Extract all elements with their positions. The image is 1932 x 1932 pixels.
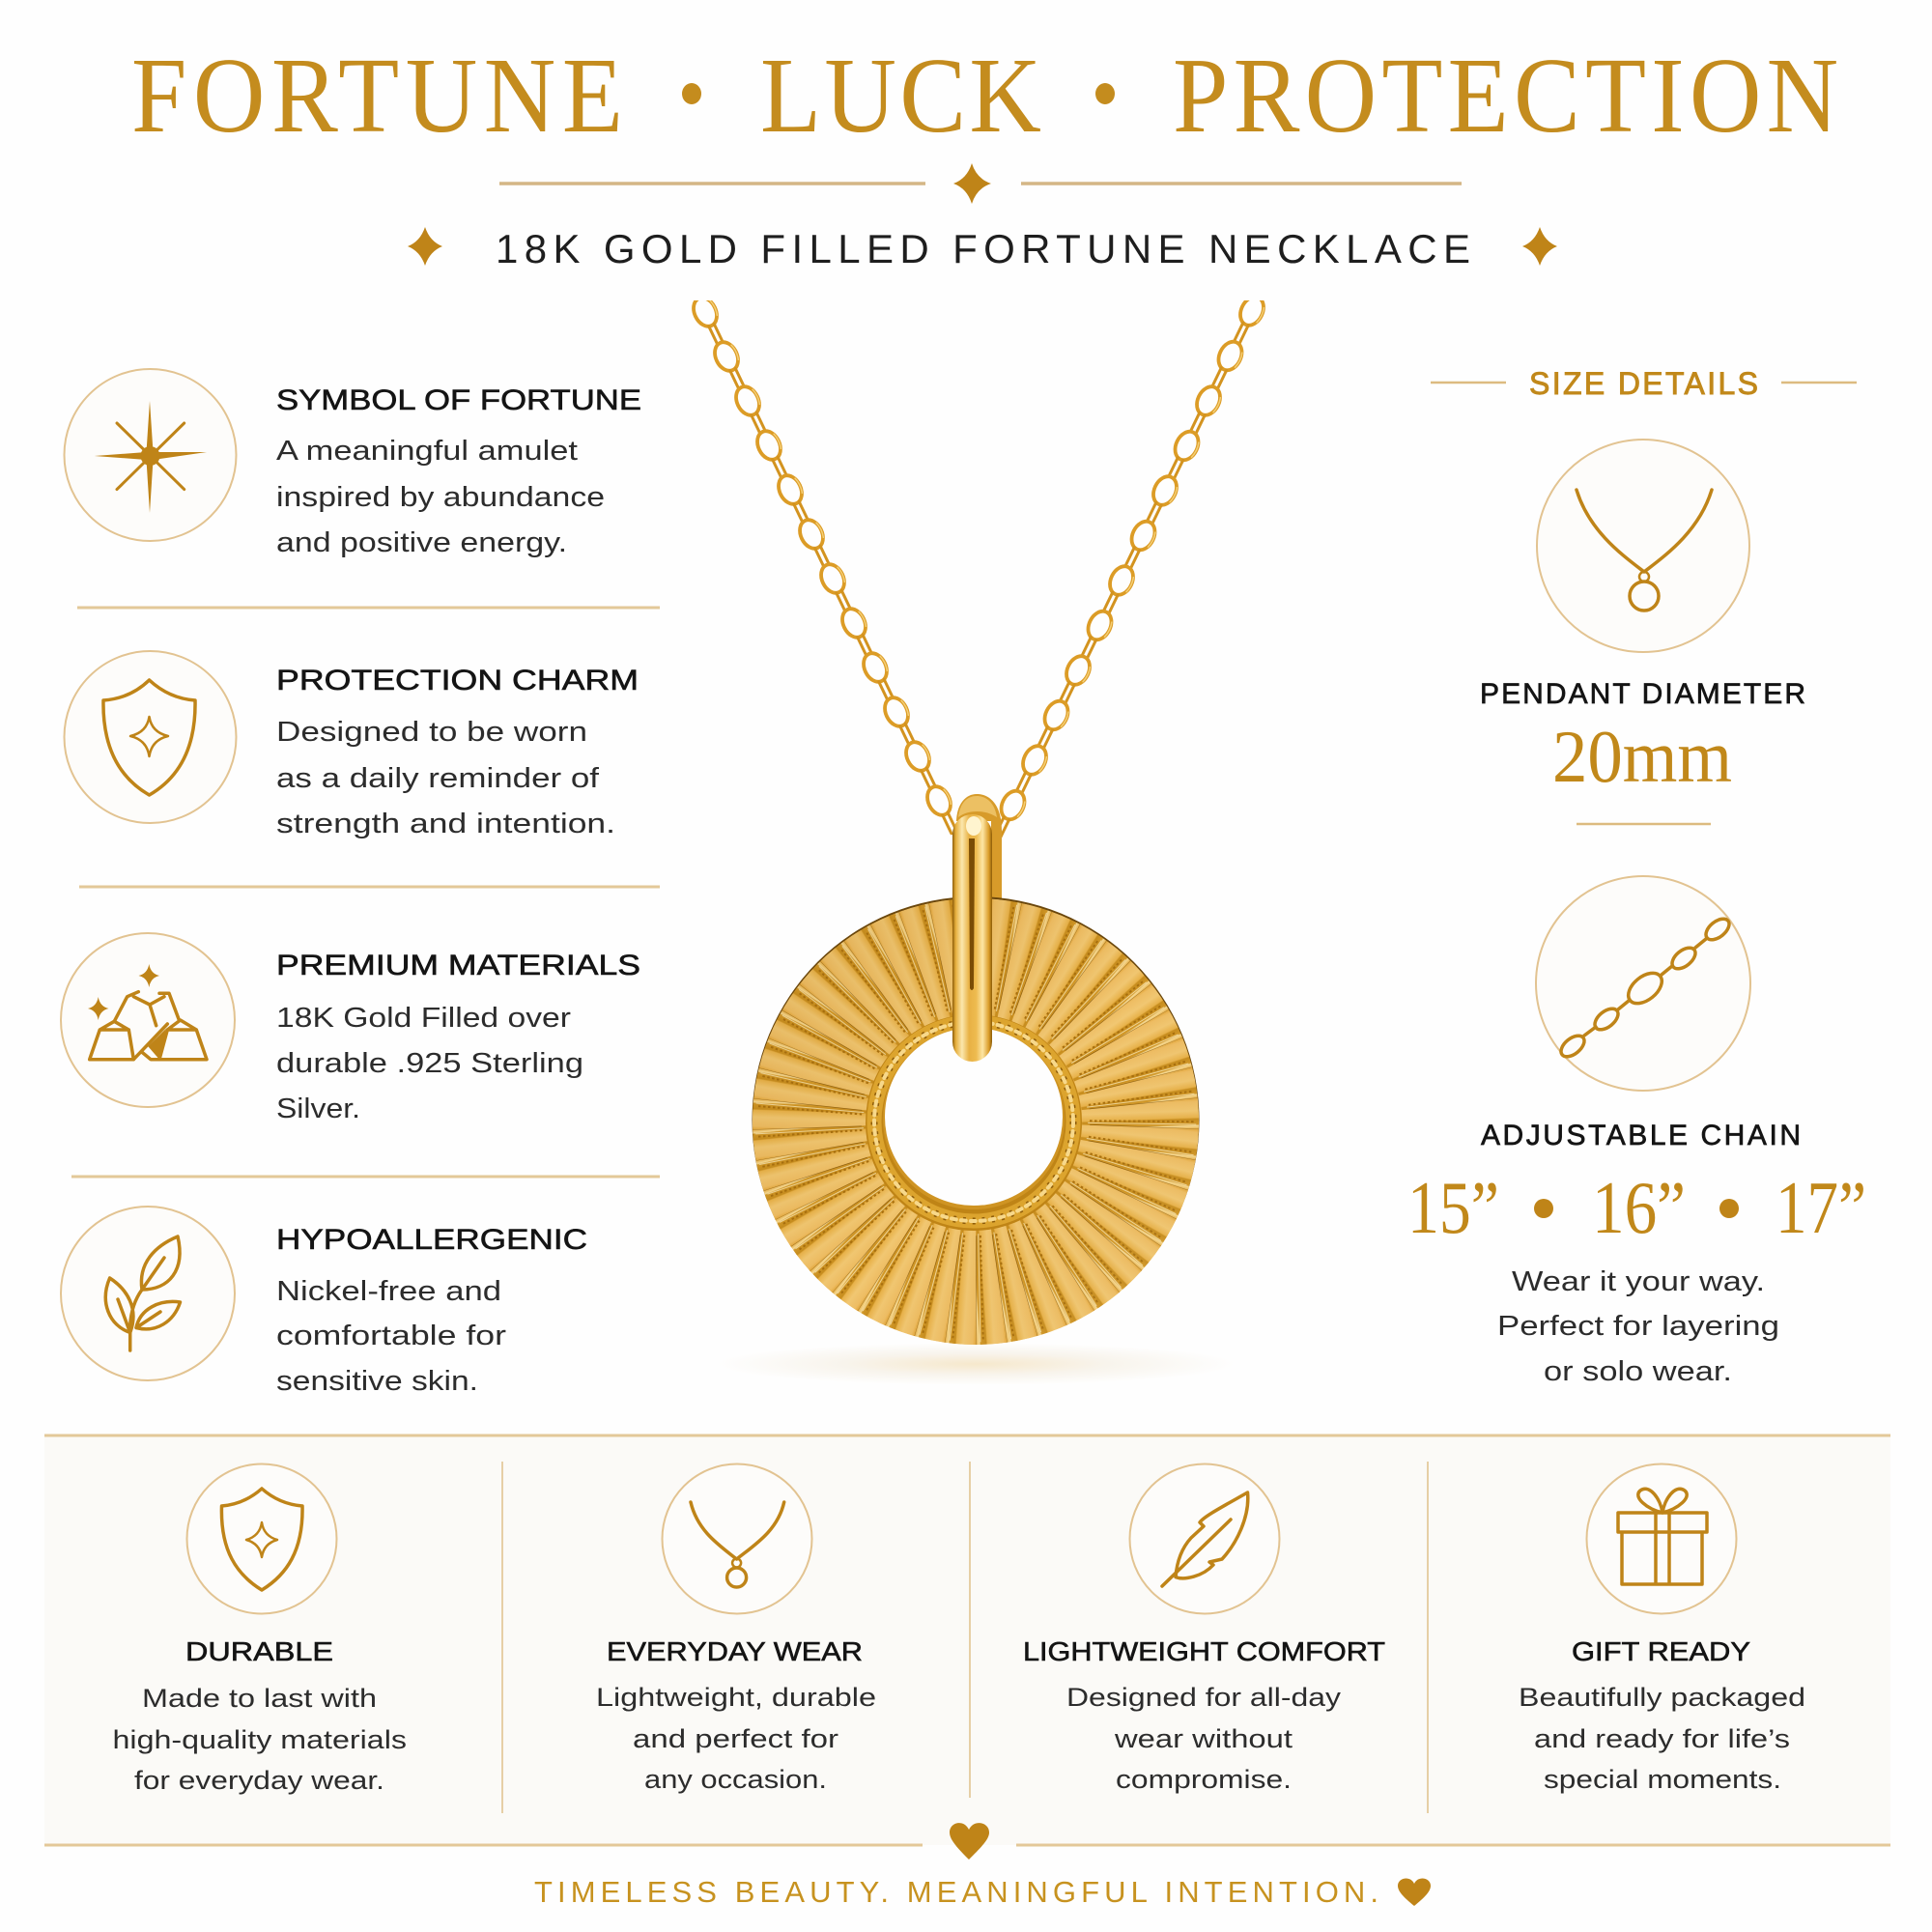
panel: bottom benefits (44, 1435, 1890, 1845)
size note: Perfect for layering (1497, 1311, 1779, 1342)
adjustable chain: 16” (1592, 1166, 1686, 1249)
footer tagline: TIMELESS BEAUTY. MEANINGFUL INTENTION. (534, 1875, 1378, 1909)
feature: premium materials: 18K Gold Filled over (276, 1003, 571, 1034)
size note: Wear it your way. (1512, 1266, 1765, 1297)
benefit: lightweight comfort: LIGHTWEIGHT COMFORT (1023, 1636, 1385, 1666)
benefit: durable: Made to last with (142, 1684, 377, 1713)
benefit: durable: high-quality materials (112, 1725, 407, 1754)
feature: protection charm: PROTECTION CHARM (276, 665, 639, 696)
pendant (752, 794, 1200, 1380)
feature: symbol of fortune: and positive energy. (276, 527, 567, 558)
panel: left features (61, 369, 660, 1397)
adjustable chain (1407, 876, 1866, 1249)
feature: protection charm (64, 651, 639, 839)
benefit: everyday wear: and perfect for (633, 1724, 838, 1753)
title: PROTECTION (1173, 37, 1838, 156)
benefit: gift ready: Beautifully packaged (1519, 1683, 1805, 1712)
subtitle: 18K GOLD FILLED FORTUNE NECKLACE (496, 226, 1470, 271)
pendant diameter: PENDANT DIAMETER (1480, 678, 1805, 710)
benefit: everyday wear (596, 1464, 876, 1794)
benefit: gift ready: special moments. (1544, 1765, 1781, 1794)
benefit: durable: DURABLE (185, 1636, 333, 1666)
feature: hypoallergenic: sensitive skin. (276, 1366, 478, 1397)
benefit: gift ready: GIFT READY (1572, 1636, 1750, 1666)
pendant diameter (1480, 440, 1805, 798)
feature: premium materials: Silver. (276, 1094, 360, 1124)
adjustable chain: 15” (1407, 1166, 1499, 1249)
size note (1497, 1266, 1779, 1387)
benefit: lightweight comfort (1023, 1464, 1385, 1794)
panel: size details (1407, 366, 1866, 1387)
benefit: lightweight comfort: wear without (1114, 1724, 1293, 1753)
title divider with star (499, 163, 1462, 204)
pendant diameter: 20mm (1552, 715, 1732, 798)
feature: hypoallergenic: Nickel-free and (276, 1276, 501, 1307)
benefit: lightweight comfort: compromise. (1116, 1765, 1292, 1794)
feature: symbol of fortune: inspired by abundance (276, 482, 605, 513)
title: LUCK (760, 37, 1041, 156)
feature: symbol of fortune: SYMBOL OF FORTUNE (276, 384, 641, 416)
benefit: lightweight comfort: Designed for all-day (1066, 1683, 1342, 1712)
feature: hypoallergenic (61, 1207, 587, 1397)
size note: or solo wear. (1544, 1356, 1732, 1387)
feature: premium materials (61, 933, 640, 1124)
adjustable chain: 17” (1776, 1166, 1866, 1249)
title (131, 37, 1838, 156)
benefit: gift ready (1519, 1464, 1805, 1794)
feature: symbol of fortune (64, 369, 641, 558)
feature: premium materials: durable .925 Sterling (276, 1048, 583, 1079)
feature: symbol of fortune: A meaningful amulet (276, 436, 578, 467)
feature: premium materials: PREMIUM MATERIALS (276, 950, 640, 981)
icon: heart (950, 1823, 989, 1860)
benefit: everyday wear: EVERYDAY WEAR (607, 1636, 863, 1666)
necklace chain (689, 293, 1268, 841)
feature: protection charm: as a daily reminder of (276, 763, 600, 794)
title: FORTUNE (131, 37, 623, 156)
feature: protection charm: Designed to be worn (276, 717, 587, 748)
feature: protection charm: strength and intention. (276, 809, 615, 839)
adjustable chain: ADJUSTABLE CHAIN (1481, 1120, 1801, 1151)
feature: hypoallergenic: HYPOALLERGENIC (276, 1224, 587, 1256)
benefit: gift ready: and ready for life’s (1534, 1724, 1790, 1753)
size details heading: SIZE DETAILS (1529, 366, 1758, 401)
benefit: durable: for everyday wear. (134, 1766, 384, 1795)
benefit: everyday wear: any occasion. (644, 1765, 827, 1794)
benefit: durable (112, 1464, 407, 1795)
feature: hypoallergenic: comfortable for (276, 1321, 506, 1351)
benefit: everyday wear: Lightweight, durable (596, 1683, 876, 1712)
